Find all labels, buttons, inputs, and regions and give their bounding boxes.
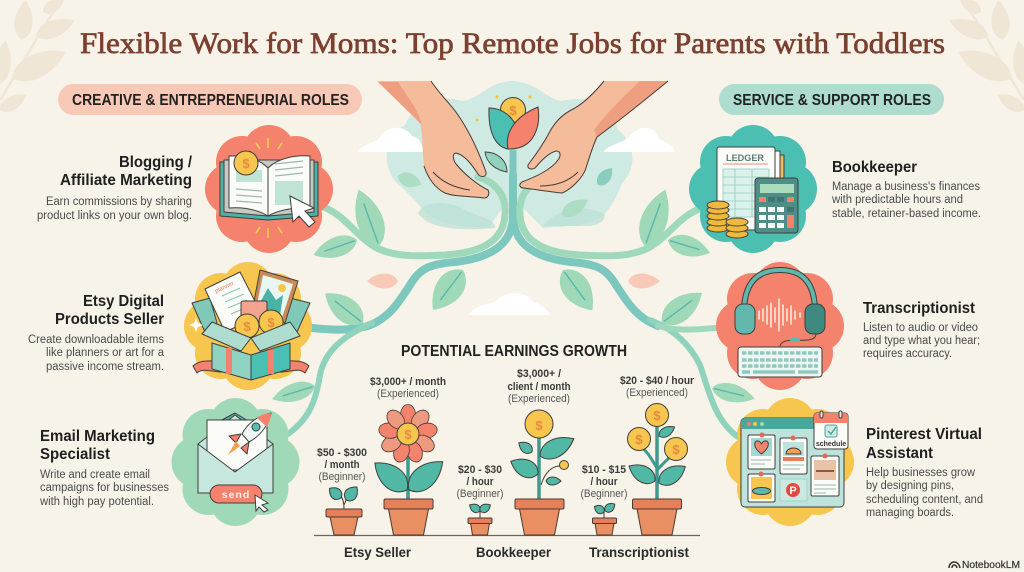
icon: headphones and keyboard [716, 262, 844, 390]
corner decoration: right branch [946, 0, 1024, 116]
label: transcriptionist beginner: / hour [590, 476, 618, 488]
heading: Etsy Digital [83, 293, 164, 310]
heading [40, 428, 155, 463]
description: like planners or art for a [46, 347, 165, 359]
label: bookkeeper experienced: $3,000+ / [517, 368, 561, 380]
heading: Products Seller [55, 311, 164, 328]
heading [60, 154, 193, 189]
plant: bookkeeper experienced [507, 410, 578, 535]
plant: etsy experienced flower: $ [404, 427, 412, 442]
icon: ledger and calculator [689, 125, 817, 253]
icon: gift box: $ [243, 319, 251, 334]
description: Listen to audio or video [863, 322, 978, 334]
label: transcriptionist beginner: $10 - $15 [582, 464, 626, 476]
icon: pin board window: schedule [816, 441, 846, 448]
description: requires accuracy. [863, 348, 952, 360]
label: transcriptionist experienced: (Experienced) [626, 387, 688, 399]
description [863, 322, 980, 360]
pill heading: service roles [719, 84, 944, 115]
label: transcriptionist beginner [580, 464, 628, 500]
icon: gift box: $ [267, 315, 275, 330]
description: with predictable hours and [831, 194, 963, 206]
label: bookkeeper beginner: (Beginner) [456, 488, 504, 500]
label: bookkeeper experienced: (Experienced) [508, 393, 570, 405]
icon: envelope with rocket [172, 398, 300, 526]
panel: bookkeeper [689, 125, 981, 253]
title: Flexible Work for Moms: Top Remote Jobs for Parents with Toddlers [80, 27, 945, 60]
plant: transcriptionist experienced: $ [672, 442, 680, 457]
panel: transcriptionist [716, 262, 980, 390]
heading: Pinterest Virtual [866, 426, 982, 443]
left hand [377, 81, 489, 198]
description: campaigns for businesses [40, 482, 169, 494]
vines [288, 175, 738, 437]
pill heading: service roles: SERVICE & SUPPORT ROLES [733, 92, 931, 109]
icon: gift box: planner [214, 281, 235, 295]
tulip with coin [476, 96, 539, 195]
pill heading: creative roles: CREATIVE & ENTREPRENEURIAL ROLES [72, 92, 349, 109]
icon: gift box [184, 262, 312, 390]
description [37, 196, 192, 222]
right hand [520, 81, 668, 193]
description: stable, retainer-based income. [832, 208, 981, 220]
plant: etsy beginner [326, 483, 362, 535]
watermark: NotebookLM [962, 559, 1020, 571]
label: transcriptionist beginner: (Beginner) [580, 488, 628, 500]
plant: bookkeeper experienced: $ [535, 418, 543, 433]
sky wisps [396, 164, 617, 229]
heading [55, 293, 164, 328]
description: managing boards. [866, 507, 954, 519]
description: by designing pins, [866, 480, 954, 492]
label: bookkeeper beginner [456, 464, 504, 500]
pill heading: creative roles [58, 84, 362, 115]
clouds [357, 128, 675, 315]
label: bookkeeper beginner: / hour [466, 476, 494, 488]
label: etsy experienced [370, 376, 446, 400]
corner decoration: left branch [0, 0, 78, 116]
heading: Blogging / [119, 154, 193, 171]
tulip with coin: $ [509, 103, 517, 118]
heading: Transcriptionist [863, 300, 976, 317]
panel: pinterest [726, 398, 983, 526]
plant: transcriptionist beginner [592, 501, 617, 535]
label: etsy beginner: (Beginner) [318, 471, 366, 483]
central sky blob [387, 81, 632, 228]
description: product links on your own blog. [37, 210, 192, 222]
plant: transcriptionist experienced [625, 404, 690, 535]
plant: transcriptionist experienced: $ [635, 432, 643, 447]
description: passive income stream. [46, 361, 164, 373]
label: transcriptionist experienced: $20 - $40 / hour [620, 375, 695, 387]
chart heading: POTENTIAL EARNINGS GROWTH [401, 343, 627, 360]
panel: etsy [28, 262, 312, 390]
heading [866, 426, 982, 462]
plant: etsy experienced flower [368, 404, 450, 535]
heading: Assistant [866, 445, 934, 462]
heading: Bookkeeper [832, 159, 917, 176]
label: etsy beginner: $50 - $300 [317, 447, 367, 459]
label: bookkeeper beginner: $20 - $30 [458, 464, 502, 476]
panel: blogging [37, 125, 333, 253]
axis label: etsy seller: Etsy Seller [344, 544, 412, 560]
plant: bookkeeper beginner [468, 502, 492, 535]
description [39, 469, 169, 508]
description: scheduling content, and [866, 494, 983, 506]
chart: potential earnings growth [314, 343, 700, 560]
heading: Email Marketing [40, 428, 155, 445]
heading: Specialist [40, 446, 111, 463]
label: etsy experienced: $3,000+ / month [370, 376, 446, 388]
label: etsy experienced: (Experienced) [377, 388, 439, 400]
description: with high pay potential. [39, 496, 154, 508]
label: etsy beginner [317, 447, 367, 483]
plant: transcriptionist experienced: $ [653, 408, 661, 423]
ground line [314, 534, 700, 536]
heading: Affiliate Marketing [60, 172, 192, 189]
label: transcriptionist experienced [620, 375, 695, 399]
icon: pin board window: P [789, 485, 797, 497]
label: etsy beginner: / month [324, 459, 360, 471]
description: Create downloadable items [28, 334, 164, 346]
description: and type what you hear; [863, 335, 980, 347]
icon: book with cursor: $ [242, 156, 250, 171]
icon: pin board window [726, 398, 854, 526]
label: bookkeeper experienced: client / month [508, 381, 571, 393]
label: bookkeeper experienced [508, 368, 571, 405]
description: Help businesses grow [866, 467, 976, 479]
description [831, 181, 981, 220]
vine leaves [269, 185, 757, 408]
icon: ledger and calculator: LEDGER [726, 153, 764, 163]
panel: email [39, 398, 300, 526]
icon: envelope with rocket: send [222, 489, 250, 501]
description [28, 334, 165, 373]
description: Earn commissions by sharing [46, 196, 192, 208]
icon: book with cursor [205, 125, 333, 253]
axis label: bookkeeper: Bookkeeper [476, 544, 552, 560]
description: Manage a business's finances [832, 181, 980, 193]
axis label: transcriptionist: Transcriptionist [589, 544, 689, 560]
description: Write and create email [40, 469, 150, 481]
description [866, 467, 983, 519]
